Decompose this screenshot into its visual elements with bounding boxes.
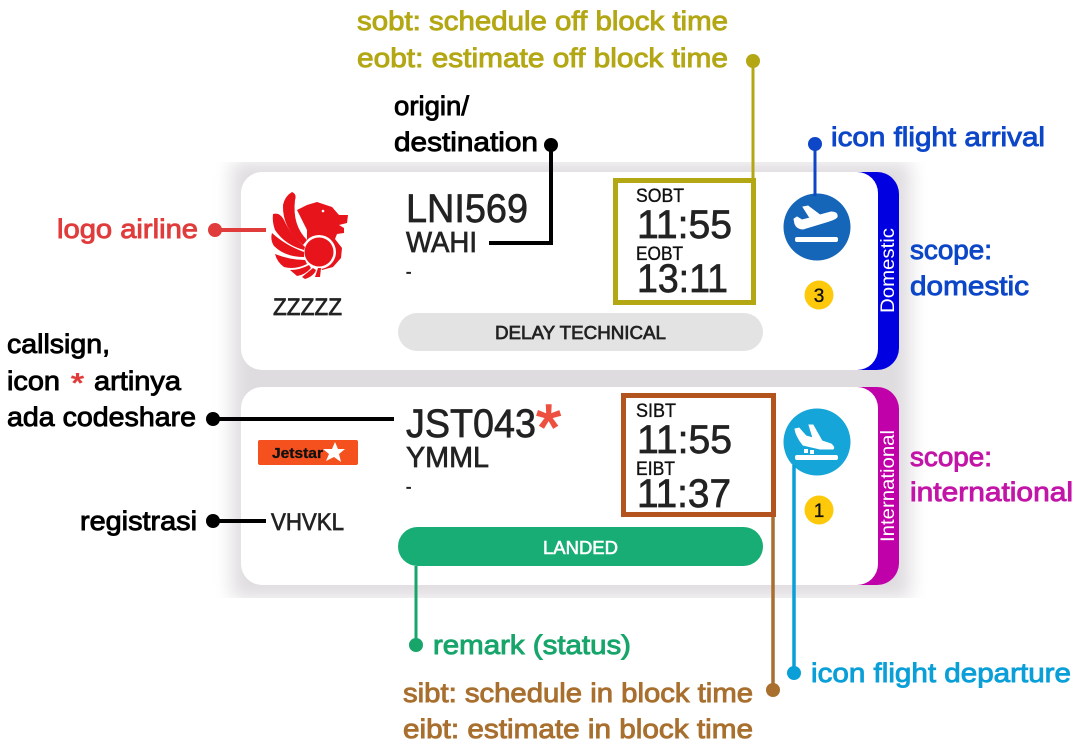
- annotation: sibt eibt: [403, 517, 780, 744]
- annotation: scope domestic: [910, 235, 1029, 301]
- callsign: JST043: JST043: [406, 402, 536, 446]
- annotation: scope domestic: domestic: [910, 271, 1029, 301]
- codeshare asterisk: *: [536, 391, 561, 464]
- status pill: delay technical: [398, 313, 763, 351]
- annotation: registrasi: registrasi: [80, 506, 197, 536]
- badge: 1: [804, 496, 834, 524]
- time box: sobt and eobt: [616, 180, 754, 302]
- scope tab: domestic: [241, 172, 899, 370]
- annotation: sobt eobt: [357, 6, 760, 178]
- icon: jetstar logo: Jetstar: [272, 445, 323, 462]
- annotation: callsign: icon: [7, 366, 60, 396]
- dash: -: [406, 264, 411, 281]
- time box: sobt and eobt: EOBT: [636, 244, 683, 265]
- annotation: scope international: scope:: [910, 442, 992, 472]
- callsign: LNI569: LNI569: [406, 187, 528, 231]
- annotation: scope international: [910, 442, 1073, 507]
- annotation: callsign: [7, 329, 394, 432]
- panel: international flight card: [241, 387, 899, 585]
- scope tab: international: [241, 387, 899, 585]
- annotation: icon flight departure: icon flight departure: [811, 658, 1071, 688]
- annotation: logo airline: [57, 214, 266, 244]
- scope tab: domestic: Domestic: [878, 228, 899, 313]
- icon: flight departure circle: [784, 408, 850, 476]
- time box: sobt and eobt: 11:55: [637, 203, 732, 247]
- time box: sibt and eibt: [624, 396, 774, 516]
- annotation: icon flight departure: [787, 465, 1071, 688]
- registration: VHVKL: VHVKL: [271, 509, 344, 536]
- time box: sibt and eibt: 11:37: [637, 472, 731, 516]
- annotation: registrasi: [80, 506, 266, 536]
- annotation: icon flight arrival: icon flight arrival: [831, 122, 1045, 152]
- icon: lion air logo: [271, 192, 348, 279]
- status pill: delay technical: DELAY TECHNICAL: [495, 323, 666, 343]
- time box: sibt and eibt: 11:55: [637, 418, 732, 462]
- annotation: remark status: remark (status): [433, 630, 631, 660]
- annotation: callsign: callsign,: [7, 329, 110, 359]
- destination: WAHI: WAHI: [406, 227, 477, 259]
- badge: 3: 3: [814, 286, 824, 307]
- dash: -: [406, 479, 411, 496]
- badge: 3: [804, 280, 834, 310]
- annotation: sibt eibt: eibt: estimate in block time: [403, 714, 753, 744]
- destination: YMML: YMML: [406, 442, 489, 474]
- annotation: remark status: [409, 566, 631, 660]
- annotation: callsign: artinya: [94, 366, 182, 396]
- annotation: scope domestic: scope:: [910, 235, 992, 265]
- panel: domestic flight card: [241, 172, 899, 370]
- annotation: callsign: ada codeshare: [7, 402, 196, 432]
- annotation: sobt eobt: eobt: estimate off block time: [357, 43, 728, 73]
- time box: sobt and eobt: SOBT: [636, 186, 684, 207]
- annotation: origin destination: [394, 91, 558, 243]
- annotation: icon flight arrival: [808, 122, 1045, 196]
- badge: 1: 1: [814, 501, 824, 522]
- icon: jetstar logo: [258, 440, 358, 465]
- time box: sibt and eibt: SIBT: [636, 401, 676, 422]
- annotation: callsign: *: [71, 368, 85, 398]
- icon: flight arrival circle: [784, 194, 850, 260]
- status pill: landed: [398, 527, 763, 566]
- annotation: origin destination: origin/: [394, 91, 469, 121]
- shadow band behind cards: [0, 120, 1080, 638]
- status pill: landed: LANDED: [543, 538, 618, 558]
- annotation: sobt eobt: sobt: schedule off block time: [357, 6, 728, 36]
- annotation: origin destination: destination: [394, 127, 538, 157]
- annotation: sibt eibt: sibt: schedule in block time: [403, 678, 753, 708]
- time box: sobt and eobt: 13:11: [637, 257, 728, 301]
- registration: ZZZZZ: ZZZZZ: [273, 294, 342, 321]
- scope tab: international: International: [878, 430, 899, 542]
- annotation: logo airline: logo airline: [57, 214, 198, 244]
- annotation: scope international: international: [910, 477, 1073, 507]
- time box: sibt and eibt: EIBT: [636, 459, 675, 480]
